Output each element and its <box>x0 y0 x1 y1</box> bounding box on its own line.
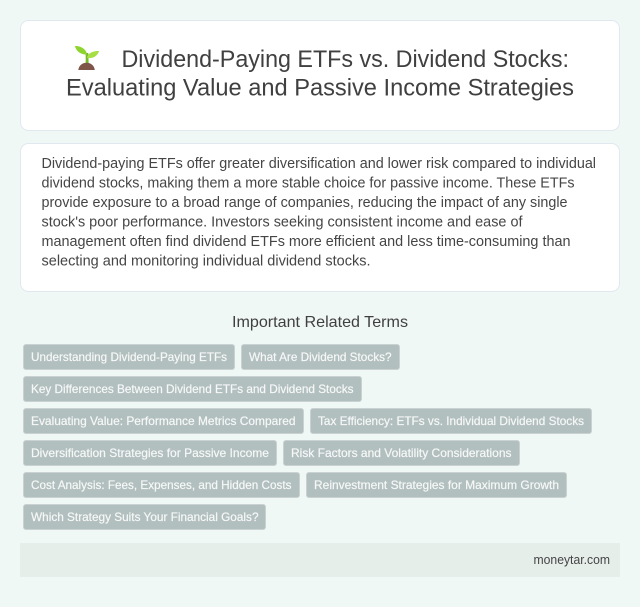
text block: summary: selecting and monitoring individual dividend stocks. <box>42 254 370 270</box>
tag: reinvestment strategies <box>306 472 566 498</box>
tag: diversification strategies: Diversification Strategies for Passive Income <box>31 446 269 460</box>
tag: diversification strategies <box>24 440 276 466</box>
tag: key differences: Key Differences Between Dividend ETFs and Dividend Stocks <box>31 382 354 396</box>
tag: what are dividend stocks <box>242 344 400 370</box>
tag: understanding dividend-paying ETFs <box>24 344 234 370</box>
tag: understanding dividend-paying ETFs: Understanding Dividend-Paying ETFs <box>31 350 227 364</box>
tag: which strategy: Which Strategy Suits Your Financial Goals? <box>31 510 259 524</box>
tag: cost analysis <box>24 472 300 498</box>
icon: sprout <box>75 46 99 70</box>
title: Dividend-Paying ETFs vs. Dividend Stocks: <box>122 46 569 73</box>
text block: summary: Dividend-paying ETFs offer greater diversification and lower risk compared to individual <box>42 156 596 172</box>
panel: related term tags <box>24 344 592 530</box>
text block: summary: stock's poor performance. Investors seeking consistent income and ease of <box>42 214 523 230</box>
text block: summary: management often find dividend ETFs more efficient and less time-consuming than <box>42 234 570 250</box>
footer <box>20 543 620 577</box>
tag: evaluating value <box>24 408 304 434</box>
panel: summary card <box>20 144 620 292</box>
tag: key differences <box>24 376 362 402</box>
tag: tax efficiency: Tax Efficiency: ETFs vs. Individual Dividend Stocks <box>318 414 584 428</box>
panel: title card <box>20 20 620 130</box>
tag: risk factors: Risk Factors and Volatility Considerations <box>291 446 512 460</box>
text block: summary: provide exposure to a broad range of companies, reducing the impact of any single <box>42 195 568 211</box>
tag: risk factors <box>284 440 520 466</box>
title <box>66 46 574 102</box>
tag: evaluating value: Evaluating Value: Performance Metrics Compared <box>31 414 296 428</box>
text block: summary: dividend stocks, making them a more stable choice for passive income. These ETFs <box>42 176 574 192</box>
tag: cost analysis: Cost Analysis: Fees, Expenses, and Hidden Costs <box>31 478 292 492</box>
title: Evaluating Value and Passive Income Strategies <box>66 74 574 102</box>
heading: related terms: Important Related Terms <box>232 314 408 331</box>
footer source text: moneytar.com <box>534 552 610 567</box>
text block: summary <box>42 156 596 270</box>
tag: what are dividend stocks: What Are Dividend Stocks? <box>249 350 392 364</box>
tag: reinvestment strategies: Reinvestment Strategies for Maximum Growth <box>314 478 559 492</box>
tag: which strategy <box>24 504 266 530</box>
tag: tax efficiency <box>310 408 592 434</box>
